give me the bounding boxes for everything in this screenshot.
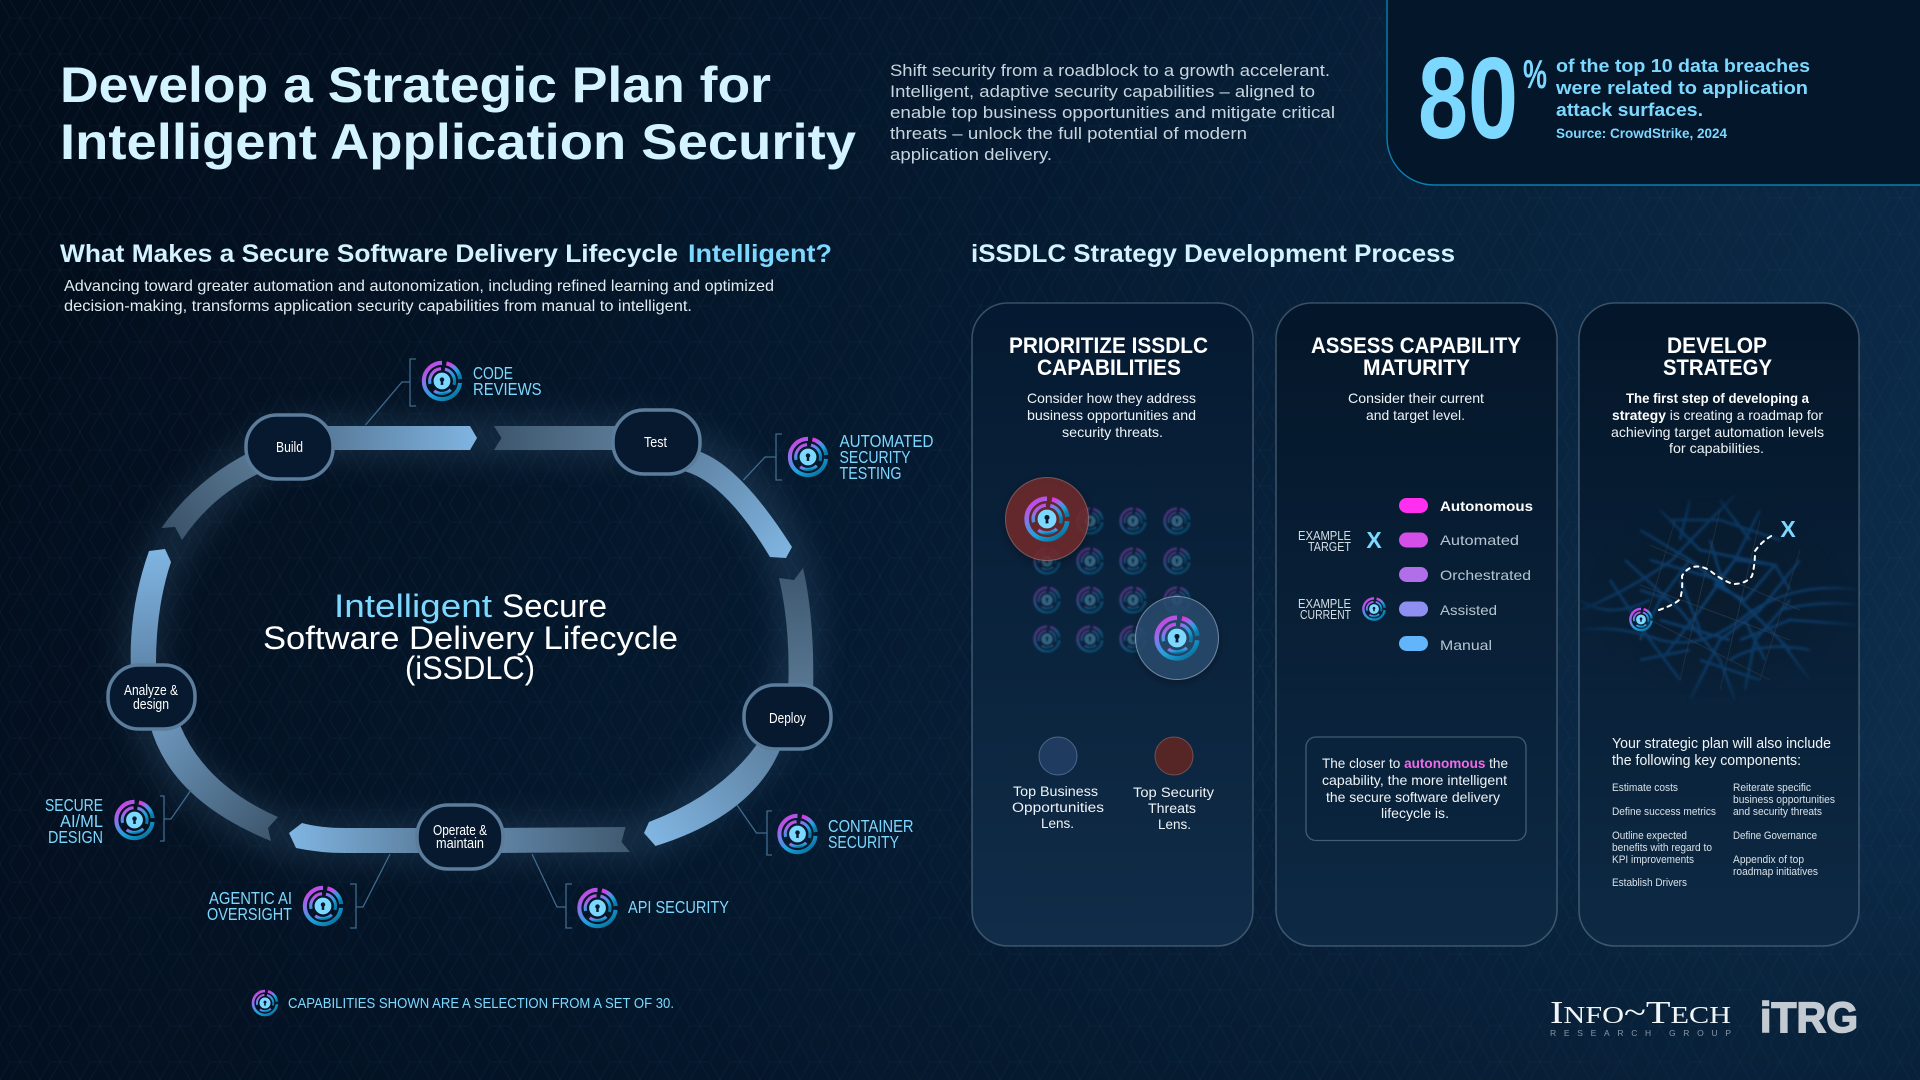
capability: API security [532, 854, 729, 928]
stage: test: Test [644, 434, 668, 451]
capability: automated security testing: SECURITY [840, 447, 911, 467]
legend: security lens [1133, 737, 1214, 832]
capability: container security: CONTAINER [828, 816, 914, 836]
card subtext [1611, 390, 1824, 456]
heading: what makes SDLC intelligent: What Makes a Secure Software Delivery Lifecycle [60, 240, 678, 268]
example target: EXAMPLE [1298, 529, 1351, 543]
logo: Info-Tech Research Group: INFO ~T ECH [1550, 994, 1731, 1030]
key components list left [1612, 782, 1716, 889]
stage: operate and maintain: Operate & [433, 822, 487, 839]
maturity scale: Assisted [1440, 602, 1497, 618]
key components list left: Establish Drivers [1612, 877, 1687, 889]
arrow: lower left [150, 725, 278, 841]
center label [263, 588, 678, 686]
key components list right: Appendix of top [1733, 854, 1804, 866]
card subtext: for capabilities. [1669, 440, 1764, 456]
key components list right: Reiterate specific [1733, 782, 1811, 794]
card heading: DEVELOP [1667, 333, 1767, 358]
example target: TARGET [1308, 540, 1351, 554]
stage: operate and maintain: maintain [436, 835, 484, 852]
example target: X [1366, 527, 1382, 553]
card heading [1009, 333, 1208, 380]
capability grid [1035, 509, 1189, 651]
panel: 80% statistic: Source: CrowdStrike, 2024 [1556, 126, 1727, 141]
intro text block: Shift security from a roadblock to a growth accelerant. [890, 61, 1330, 80]
capability: container security: SECURITY [828, 832, 899, 852]
capability: automated security testing: AUTOMATED [840, 431, 934, 451]
arrow: into deploy [779, 568, 813, 695]
intro text block: enable top business opportunities and mitigate critical [890, 103, 1335, 122]
key components list left: Define success metrics [1612, 806, 1716, 818]
card subtext: business opportunities and [1027, 407, 1196, 423]
arrow: upper left [161, 452, 262, 540]
panel: 80% statistic: were related to application [1555, 77, 1808, 98]
center label: (iSSDLC) [405, 650, 535, 686]
key components list left: Estimate costs [1612, 782, 1678, 794]
callout: lifecycle is. [1381, 805, 1449, 821]
card heading: PRIORITIZE ISSDLC [1009, 333, 1208, 358]
capability: secure AI/ML design: SECURE [45, 795, 103, 815]
panel: 80% statistic: 80 [1418, 33, 1518, 163]
left description [64, 278, 774, 315]
security threats lens [1006, 478, 1088, 560]
card heading [1311, 333, 1521, 380]
legend: security lens: Threats [1148, 801, 1196, 816]
capability: API security: API SECURITY [628, 897, 729, 917]
logo: Info-Tech Research Group: RESEARCH GROUP [1550, 1028, 1731, 1038]
capability: code reviews: REVIEWS [473, 379, 542, 399]
stage: analyze and design: design [133, 696, 169, 713]
card subtext: Consider their current [1348, 390, 1484, 406]
legend: business lens: Lens. [1041, 816, 1074, 831]
arrow: deploy to operate [644, 745, 782, 846]
card subtext: The first step of developing a [1626, 390, 1809, 406]
example target [1298, 527, 1382, 554]
logo: ITRG: iTRG [1760, 994, 1858, 1042]
card heading: MATURITY [1363, 355, 1470, 380]
panel: 80% statistic: of the top 10 data breaches [1556, 55, 1810, 76]
maturity scale: Automated [1440, 532, 1519, 548]
card heading [1663, 333, 1772, 380]
maturity scale: Manual [1440, 637, 1492, 653]
stage: deploy: Deploy [769, 710, 806, 727]
roadmap street map [1580, 495, 1860, 700]
capability: code reviews: CODE [473, 363, 513, 383]
left description: decision-making, transforms application security capabilities from manual to intelligent. [64, 298, 692, 315]
key components list left: Outline expected [1612, 830, 1687, 842]
title: Develop a Strategic Plan for [60, 57, 771, 113]
example current: EXAMPLE [1298, 597, 1351, 611]
arrow: analyze to build [131, 549, 171, 672]
maturity scale [1399, 498, 1533, 653]
callout [1306, 737, 1526, 840]
panel: develop strategy [1579, 303, 1860, 946]
key components list right: Define Governance [1733, 830, 1817, 842]
intro text block: application delivery. [890, 145, 1052, 164]
arrow: build to test [325, 426, 477, 450]
lifecycle ring [131, 426, 813, 853]
callout: capability, the more intelligent [1322, 772, 1507, 788]
center label: Software Delivery Lifecycle [263, 620, 678, 656]
key components intro: Your strategic plan will also include [1612, 736, 1831, 752]
callout: The closer to autonomous the [1322, 755, 1508, 771]
maturity scale: Orchestrated [1440, 567, 1531, 583]
center label: Secure [502, 588, 607, 624]
card subtext: security threats. [1062, 424, 1163, 440]
roadmap current icon [1630, 609, 1652, 630]
key components list right: and security threats [1733, 806, 1822, 818]
capability: automated security testing: TESTING [840, 463, 902, 483]
title [60, 57, 856, 170]
legend: business lens [1012, 737, 1104, 831]
panel: assess capability maturity [1276, 303, 1557, 946]
key components list left: benefits with regard to [1612, 842, 1712, 854]
legend: security lens: Top Security [1133, 785, 1214, 800]
title: Intelligent Application Security [60, 114, 856, 170]
capability: agentic AI oversight [207, 854, 390, 928]
arrow: operate to analyze [289, 823, 425, 853]
stage: build: Build [276, 439, 303, 456]
cycle glow [143, 438, 800, 840]
stage: analyze and design: Analyze & [124, 682, 178, 699]
capability: secure AI/ML design [45, 790, 191, 847]
card heading: STRATEGY [1663, 355, 1772, 380]
arrow: into test [494, 426, 620, 450]
key components list right: business opportunities [1733, 794, 1835, 806]
capability: code reviews [366, 359, 542, 425]
intro text block: Intelligent, adaptive security capabilities – aligned to [890, 82, 1315, 101]
capability: automated security testing [744, 431, 934, 483]
footnote [253, 991, 674, 1015]
callout: the secure software delivery [1326, 789, 1500, 805]
intro text block [890, 61, 1335, 164]
business opportunities lens [1136, 596, 1218, 680]
capability: container security [737, 805, 914, 855]
roadmap route [1659, 535, 1773, 610]
card heading: ASSESS CAPABILITY [1311, 333, 1521, 358]
panel: 80% statistic: attack surfaces. [1556, 99, 1703, 120]
key components intro [1612, 736, 1831, 769]
arrow: into operate [495, 827, 630, 853]
intro text block: threats – unlock the full potential of modern [890, 124, 1247, 143]
footnote: CAPABILITIES SHOWN ARE A SELECTION FROM A SET OF 30. [288, 995, 674, 1012]
stage: test [613, 410, 700, 474]
capability: agentic AI oversight: AGENTIC AI [209, 888, 292, 908]
legend: business lens: Top Business [1013, 784, 1098, 799]
capability: agentic AI oversight: OVERSIGHT [207, 904, 292, 924]
panel: 80% statistic [1387, 0, 1920, 185]
key components list left: KPI improvements [1612, 854, 1694, 866]
card subtext: and target level. [1366, 407, 1465, 423]
legend: security lens: Lens. [1158, 817, 1191, 832]
example current [1298, 597, 1385, 622]
maturity scale: Autonomous [1440, 498, 1533, 514]
card heading: CAPABILITIES [1037, 355, 1181, 380]
legend: business lens: Opportunities [1012, 800, 1104, 815]
key components list right [1733, 782, 1835, 878]
left description: Advancing toward greater automation and autonomization, including refined learning and optimized [64, 278, 774, 295]
card subtext: strategy is creating a roadmap for [1612, 407, 1823, 423]
roadmap target X: X [1780, 516, 1796, 542]
stage: operate and maintain [417, 805, 503, 869]
capability: secure AI/ML design: AI/ML [60, 811, 103, 831]
center label: Intelligent [334, 588, 492, 624]
heading: what makes SDLC intelligent: Intelligent? [688, 240, 832, 268]
heading: strategy process: iSSDLC Strategy Development Process [971, 240, 1455, 268]
card subtext: achieving target automation levels [1611, 424, 1824, 440]
card subtext [1027, 390, 1196, 440]
card subtext [1348, 390, 1484, 423]
stage: build [246, 415, 333, 479]
capability: secure AI/ML design: DESIGN [48, 827, 103, 847]
card subtext: Consider how they address [1027, 390, 1196, 406]
stage: deploy [744, 685, 831, 749]
panel: 80% statistic: % [1523, 51, 1547, 97]
panel: prioritize capabilities [972, 303, 1253, 946]
arrow: test to deploy [684, 451, 792, 558]
example current: CURRENT [1300, 608, 1351, 622]
key components intro: the following key components: [1612, 753, 1801, 769]
stage: analyze and design [108, 665, 195, 729]
key components list right: roadmap initiatives [1733, 866, 1818, 878]
